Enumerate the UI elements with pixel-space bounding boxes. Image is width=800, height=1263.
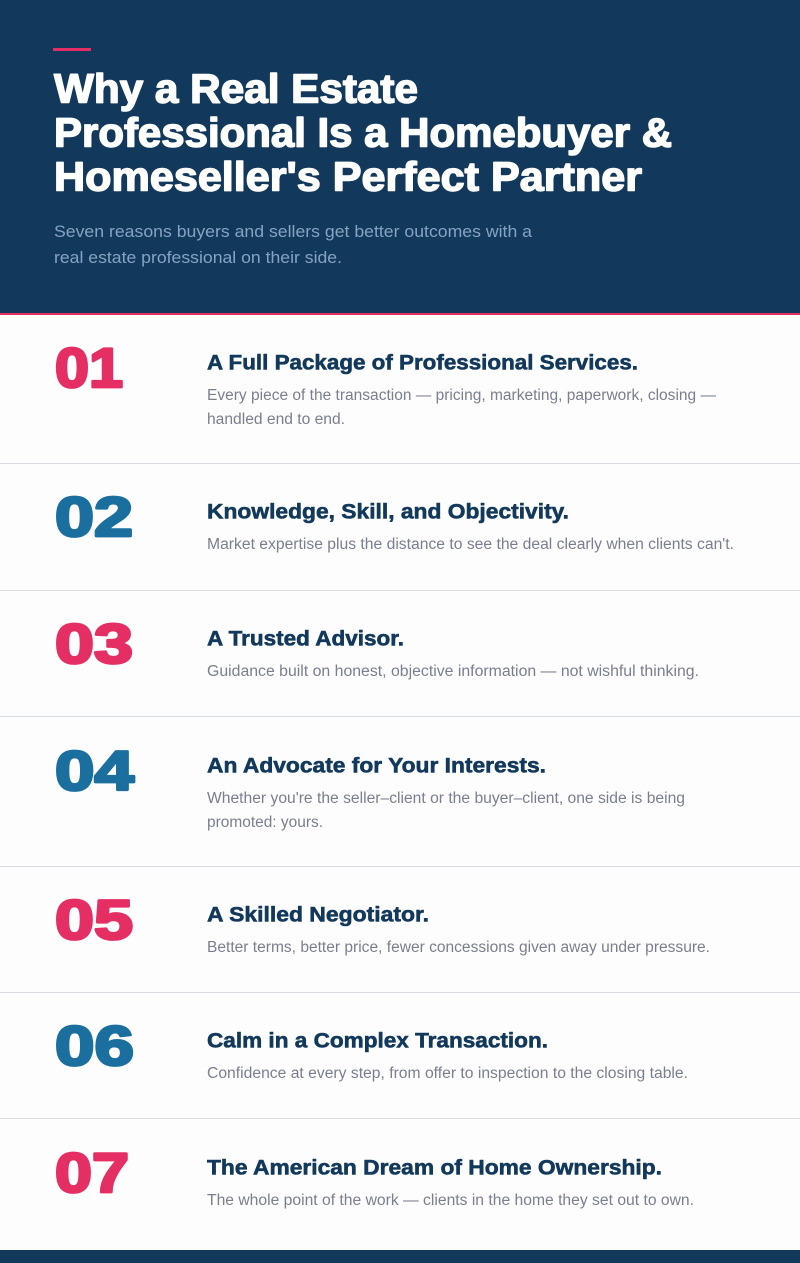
header panel [0,0,800,315]
number 03: 03 [55,612,133,675]
heading 5: A Skilled Negotiator. [207,902,429,926]
number 02: 02 [55,485,133,548]
reason 5 [55,888,710,956]
number 05: 05 [55,888,133,951]
reason 7 [55,1141,694,1209]
subtitle: real estate professional on their side. [54,248,342,267]
number 04: 04 [55,739,134,802]
reason 6 [55,1014,688,1082]
description 1 [207,387,716,428]
number 01: 01 [55,336,123,399]
reason 4 [55,739,685,831]
description 4: promoted: yours. [207,814,323,831]
subtitle: Seven reasons buyers and sellers get better outcomes with a [54,222,533,241]
description 1: Every piece of the transaction — pricing, marketing, paperwork, closing — [207,387,716,404]
title: Homeseller's Perfect Partner [54,154,642,200]
heading 3: A Trusted Advisor. [207,626,404,650]
title: Professional Is a Homebuyer & [54,110,672,156]
reason 1 [55,336,716,428]
description 4 [207,790,685,831]
title [54,66,672,200]
description 6: Confidence at every step, from offer to inspection to the closing table. [207,1065,688,1082]
description 1: handled end to end. [207,411,345,428]
description 4: Whether you're the seller–client or the buyer–client, one side is being [207,790,685,807]
description 7: The whole point of the work — clients in the home they set out to own. [207,1192,694,1209]
heading 2: Knowledge, Skill, and Objectivity. [207,500,569,524]
description 2: Market expertise plus the distance to see the deal clearly when clients can't. [207,536,734,553]
reason 2 [55,485,734,553]
number 06: 06 [55,1014,134,1077]
footer bar [0,1250,800,1263]
reason 3 [55,612,699,680]
subtitle [54,222,533,267]
description 5: Better terms, better price, fewer concessions given away under pressure. [207,939,710,956]
heading 6: Calm in a Complex Transaction. [207,1028,548,1052]
heading 1: A Full Package of Professional Services. [207,350,638,374]
heading 4: An Advocate for Your Interests. [207,754,546,778]
description 3: Guidance built on honest, objective information — not wishful thinking. [207,663,699,680]
heading 7: The American Dream of Home Ownership. [207,1156,662,1180]
title: Why a Real Estate [54,66,418,112]
number 07: 07 [55,1141,129,1204]
accent bar [53,48,91,51]
